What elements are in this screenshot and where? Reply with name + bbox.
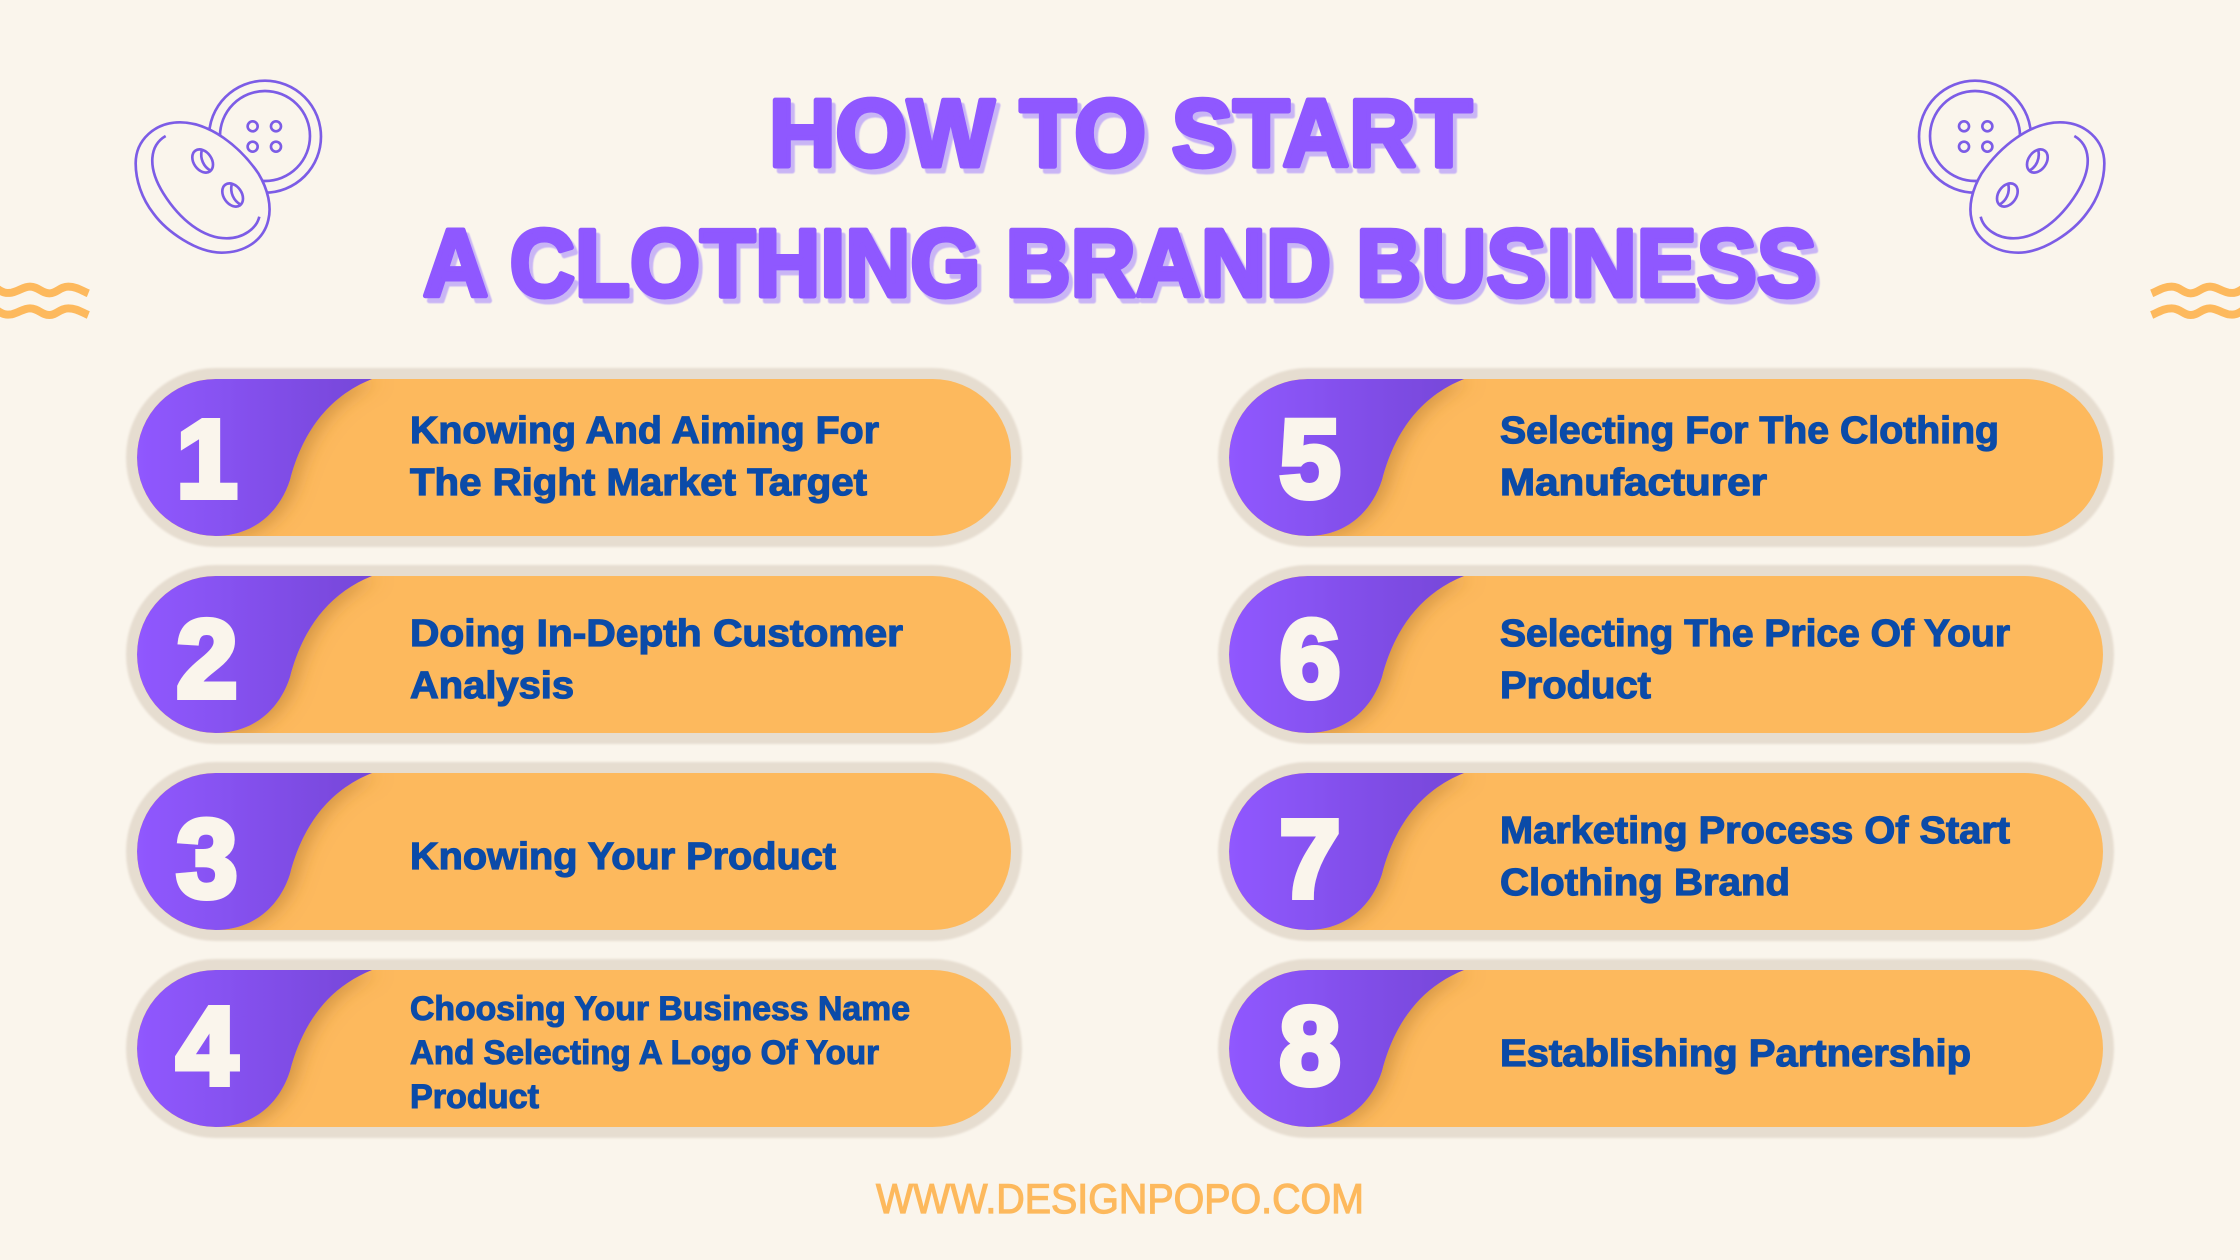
step 4: 4 <box>176 985 238 1108</box>
step 4 <box>126 959 1022 1138</box>
decoration: waves right <box>2152 287 2240 315</box>
step 6: Selecting The Price Of Your <box>1500 613 2010 655</box>
step 7: Clothing Brand <box>1500 862 1790 904</box>
step 3: Knowing Your Product <box>410 836 836 878</box>
step 6: Product <box>1500 665 1651 707</box>
step 4: Product <box>410 1078 539 1116</box>
step 1: 1 <box>176 398 238 521</box>
step 7 <box>1218 762 2114 941</box>
step 2: 2 <box>176 598 238 721</box>
decoration: waves left <box>0 287 88 315</box>
step 8: 8 <box>1279 985 1341 1108</box>
icon: buttons left <box>136 81 321 253</box>
step 7: Marketing Process Of Start <box>1500 810 2010 852</box>
title <box>423 80 1817 317</box>
step 6 <box>1218 565 2114 744</box>
step 8 <box>1218 959 2114 1138</box>
step 2: Analysis <box>410 665 574 707</box>
step 8: Establishing Partnership <box>1500 1033 1971 1075</box>
step 1: The Right Market Target <box>410 462 867 504</box>
step 1: Knowing And Aiming For <box>410 410 879 452</box>
step 1 <box>126 368 1022 547</box>
step 5 <box>1218 368 2114 547</box>
step 5: Selecting For The Clothing <box>1500 410 1999 452</box>
title: HOW TO START <box>769 80 1472 187</box>
step 7: 7 <box>1279 798 1341 921</box>
icon: buttons right <box>1919 81 2104 253</box>
step 2 <box>126 565 1022 744</box>
step 4: Choosing Your Business Name <box>410 990 910 1028</box>
step 5: Manufacturer <box>1500 462 1767 504</box>
step 2: Doing In-Depth Customer <box>410 613 903 655</box>
step 6: 6 <box>1279 598 1341 721</box>
step 4: And Selecting A Logo Of Your <box>410 1034 879 1072</box>
step 3: 3 <box>176 798 238 921</box>
step 5: 5 <box>1279 398 1341 521</box>
title: A CLOTHING BRAND BUSINESS <box>423 210 1817 317</box>
step 3 <box>126 762 1022 941</box>
footer url: WWW.DESIGNPOPO.COM <box>876 1175 1364 1222</box>
